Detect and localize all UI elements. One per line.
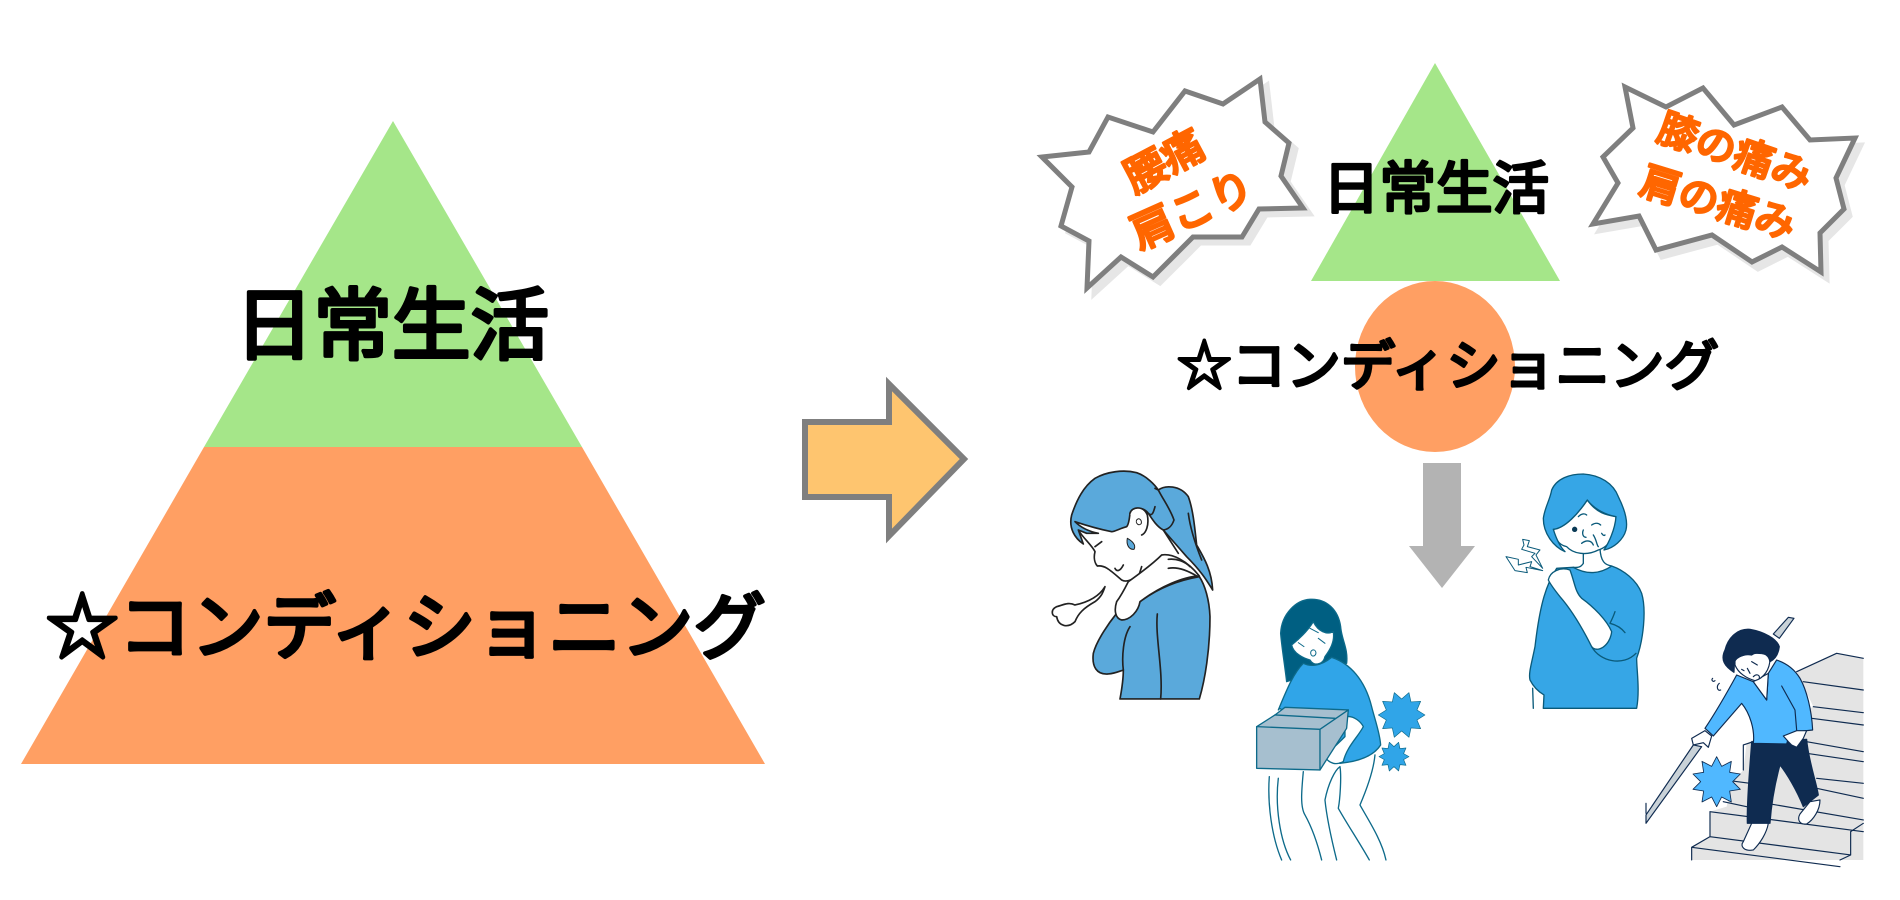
callout: lower back and shoulder stiffness — [1042, 79, 1310, 294]
panel: right diagram — [1177, 63, 1719, 452]
small ellipse: conditioning — [1355, 281, 1515, 452]
panel: left pyramid — [21, 121, 766, 764]
callout: knee and shoulder pain: 膝の痛み — [1652, 106, 1817, 200]
figure: woman with stiff shoulder — [1052, 471, 1213, 699]
figure: older woman holding shoulder — [1506, 474, 1644, 708]
arrow: right — [805, 384, 964, 536]
label: daily life small: 日常生活 — [1323, 157, 1549, 220]
callout: lower back and shoulder stiffness: 肩こり — [1124, 163, 1261, 259]
figure: woman descending stairs with knee pain — [1646, 617, 1863, 867]
callout: lower back and shoulder stiffness: 腰痛 — [1116, 121, 1212, 202]
small triangle: daily life — [1311, 63, 1560, 281]
callout: knee and shoulder pain — [1593, 87, 1861, 279]
label: conditioning small: ☆コンディショニング — [1177, 336, 1719, 397]
arrow: down — [1409, 463, 1475, 588]
callout: knee and shoulder pain: 肩の痛み — [1635, 160, 1801, 248]
figure: woman lifting a box — [1257, 599, 1425, 860]
pyramid base: conditioning — [21, 447, 765, 764]
label: daily life: 日常生活 — [235, 282, 549, 370]
label: conditioning: ☆コンディショニング — [46, 588, 766, 669]
pyramid top: daily life — [204, 121, 582, 447]
